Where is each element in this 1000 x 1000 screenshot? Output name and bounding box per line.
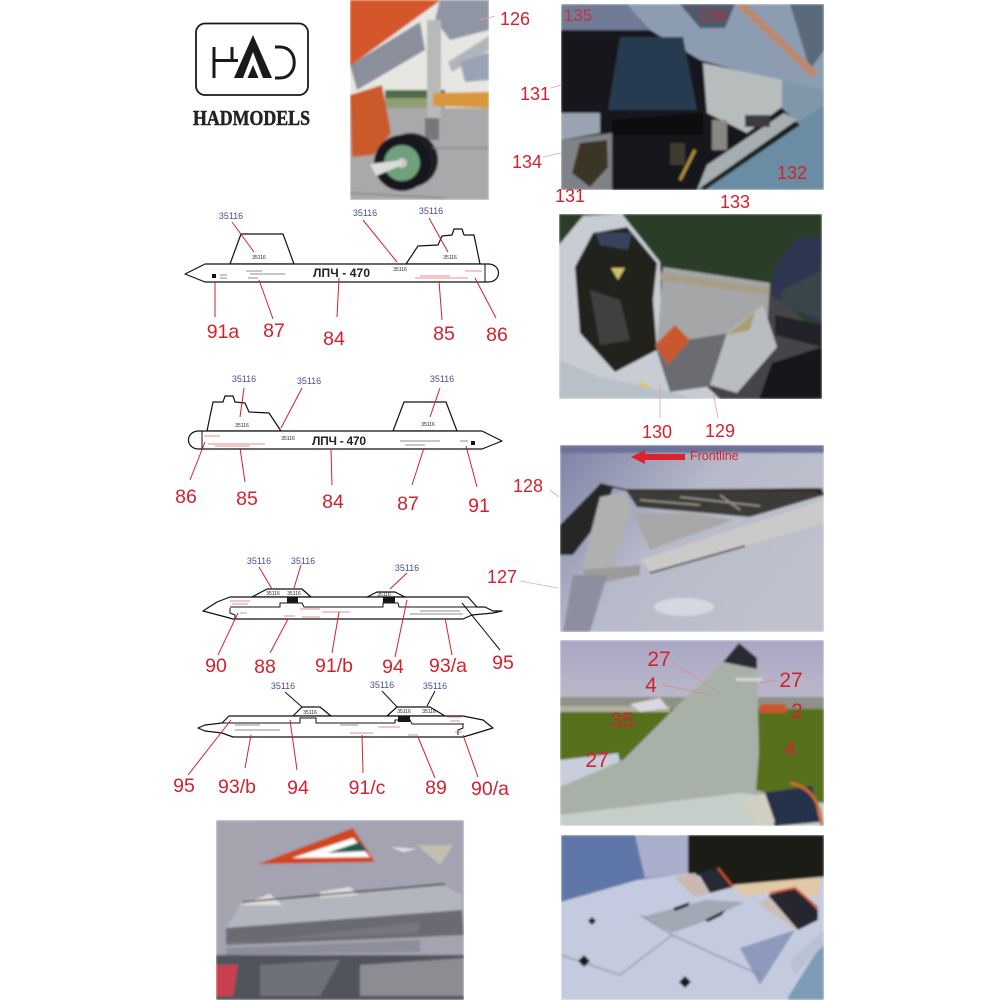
labels inside cockpit photo: 136 — [699, 6, 727, 25]
labels inside cockpit photo: 135 — [564, 6, 592, 25]
serial numbers 35116: 35116 — [281, 436, 295, 442]
serial numbers 35116 — [219, 206, 457, 273]
serial numbers 35116: 35116 — [232, 374, 256, 384]
label: 126: 126 — [500, 9, 530, 29]
brand name: HADMODELS: HADMODELS — [193, 106, 310, 130]
part numbers: 91/c — [349, 777, 386, 799]
labels: 130 and 129 — [642, 384, 735, 442]
serial numbers 35116: 35116 — [395, 563, 419, 573]
labels on tail photo: 27 — [779, 669, 803, 692]
label: 126 — [480, 9, 530, 29]
photo: cockpit side — [561, 4, 824, 190]
missile diagram 2 — [175, 374, 502, 517]
stencil marks — [212, 271, 482, 278]
labels: 128 and 127: 128 — [513, 476, 543, 496]
serial numbers 35116: 35116 — [370, 680, 394, 690]
photo: open cockpit — [559, 214, 822, 399]
missile diagram 3 — [203, 556, 514, 678]
serial numbers 35116: 35116 — [287, 591, 301, 597]
photo: airframe spine with frontline arrow — [560, 445, 824, 632]
part numbers: 86 — [175, 486, 197, 508]
black blocks — [287, 597, 395, 603]
part numbers — [205, 652, 514, 678]
leader lines — [215, 218, 496, 320]
black block — [398, 716, 410, 722]
serial numbers 35116: 35116 — [397, 709, 411, 715]
missile body — [185, 264, 498, 282]
serial numbers 35116 — [247, 556, 419, 598]
designation ЛПЧ-470: ЛПЧ - 470 — [313, 266, 370, 280]
text: Frontline: Frontline — [690, 449, 739, 463]
missile body — [188, 431, 502, 449]
fin right — [406, 229, 480, 264]
leader lines — [190, 388, 477, 487]
serial numbers 35116: 35116 — [266, 591, 280, 597]
stencil marks — [235, 717, 462, 735]
labels on tail photo: 4 — [784, 738, 796, 761]
fairing domes — [252, 589, 405, 597]
part numbers — [173, 775, 509, 800]
photo: tail fin — [560, 640, 824, 826]
leader lines — [285, 691, 435, 707]
labels on tail photo: 27 — [585, 749, 609, 772]
part numbers: 90/a — [471, 778, 509, 800]
serial numbers 35116: 35116 — [423, 681, 447, 691]
serial numbers 35116: 35116 — [430, 374, 454, 384]
serial numbers 35116 — [271, 680, 447, 716]
fin left — [230, 234, 294, 264]
labels: cockpit callouts — [512, 84, 750, 212]
logo: HAD — [196, 24, 308, 95]
serial numbers 35116: 35116 — [252, 255, 266, 261]
labels: 128 and 127 — [487, 476, 559, 588]
serial numbers 35116 — [232, 374, 454, 442]
serial numbers 35116: 35116 — [422, 709, 436, 715]
serial numbers 35116: 35116 — [419, 206, 443, 216]
serial numbers 35116: 35116 — [443, 255, 457, 261]
part numbers: 89 — [425, 777, 447, 799]
photo: engine nozzles — [561, 835, 824, 1000]
missile body — [198, 716, 493, 737]
part numbers: 91a — [207, 321, 239, 343]
part numbers: 93/b — [218, 776, 256, 798]
serial numbers 35116: 35116 — [271, 681, 295, 691]
part numbers: 94 — [287, 777, 309, 799]
labels: cockpit callouts: 131 — [520, 84, 550, 104]
labels inside cockpit photo: 132 — [777, 163, 807, 183]
labels on tail photo: 27 — [647, 648, 671, 671]
part numbers: 91/b — [315, 655, 353, 677]
part numbers — [175, 486, 490, 517]
labels: 128 and 127: 127 — [487, 567, 517, 587]
part numbers: 84 — [323, 328, 345, 350]
labels: cockpit callouts: 134 — [512, 152, 542, 172]
arrow: frontline direction — [631, 450, 685, 464]
part numbers: 95 — [173, 775, 195, 797]
serial numbers 35116: 35116 — [377, 592, 391, 598]
labels: cockpit callouts: 133 — [720, 192, 750, 212]
part numbers: 91 — [468, 495, 490, 517]
fairing domes — [293, 707, 445, 716]
photo: nose landing gear — [350, 0, 489, 200]
missile diagram 4 — [173, 680, 509, 800]
labels on tail photo: 2 — [791, 700, 803, 723]
designation ЛПЧ-470: ЛПЧ - 470 — [312, 434, 366, 448]
labels: 130 and 129: 130 — [642, 422, 672, 442]
part numbers: 85 — [236, 488, 258, 510]
serial numbers 35116: 35116 — [393, 267, 407, 273]
stencil marks — [204, 436, 475, 446]
serial numbers 35116: 35116 — [247, 556, 271, 566]
missile diagram 1 — [185, 206, 508, 350]
serial numbers 35116: 35116 — [235, 423, 249, 429]
part numbers: 95 — [492, 652, 514, 674]
fin right — [393, 402, 457, 431]
labels on tail photo: 35 — [610, 709, 634, 732]
fin left — [207, 396, 281, 431]
labels on tail photo — [585, 648, 803, 772]
part numbers: 94 — [382, 656, 404, 678]
labels: cockpit callouts: 131 — [555, 186, 585, 206]
labels on tail photo: 4 — [645, 674, 657, 697]
part numbers: 87 — [263, 320, 285, 342]
part numbers — [207, 320, 508, 350]
missile body — [203, 597, 502, 619]
photo: wing pylon with roundel marking — [216, 820, 464, 1000]
serial numbers 35116: 35116 — [219, 211, 243, 221]
part numbers: 87 — [397, 493, 419, 515]
labels: 130 and 129: 129 — [705, 421, 735, 441]
part numbers: 90 — [205, 655, 227, 677]
labels inside cockpit photo — [564, 6, 807, 183]
stencil marks — [230, 601, 463, 617]
serial numbers 35116: 35116 — [291, 556, 315, 566]
part numbers: 86 — [486, 324, 508, 346]
leader lines — [218, 565, 452, 657]
part numbers: 85 — [433, 323, 455, 345]
serial numbers 35116: 35116 — [353, 208, 377, 218]
serial numbers 35116: 35116 — [303, 710, 317, 716]
serial numbers 35116: 35116 — [421, 422, 435, 428]
serial numbers 35116: 35116 — [297, 376, 321, 386]
part numbers: 93/a — [429, 655, 467, 677]
part numbers: 88 — [254, 656, 276, 678]
part numbers: 84 — [322, 491, 344, 513]
